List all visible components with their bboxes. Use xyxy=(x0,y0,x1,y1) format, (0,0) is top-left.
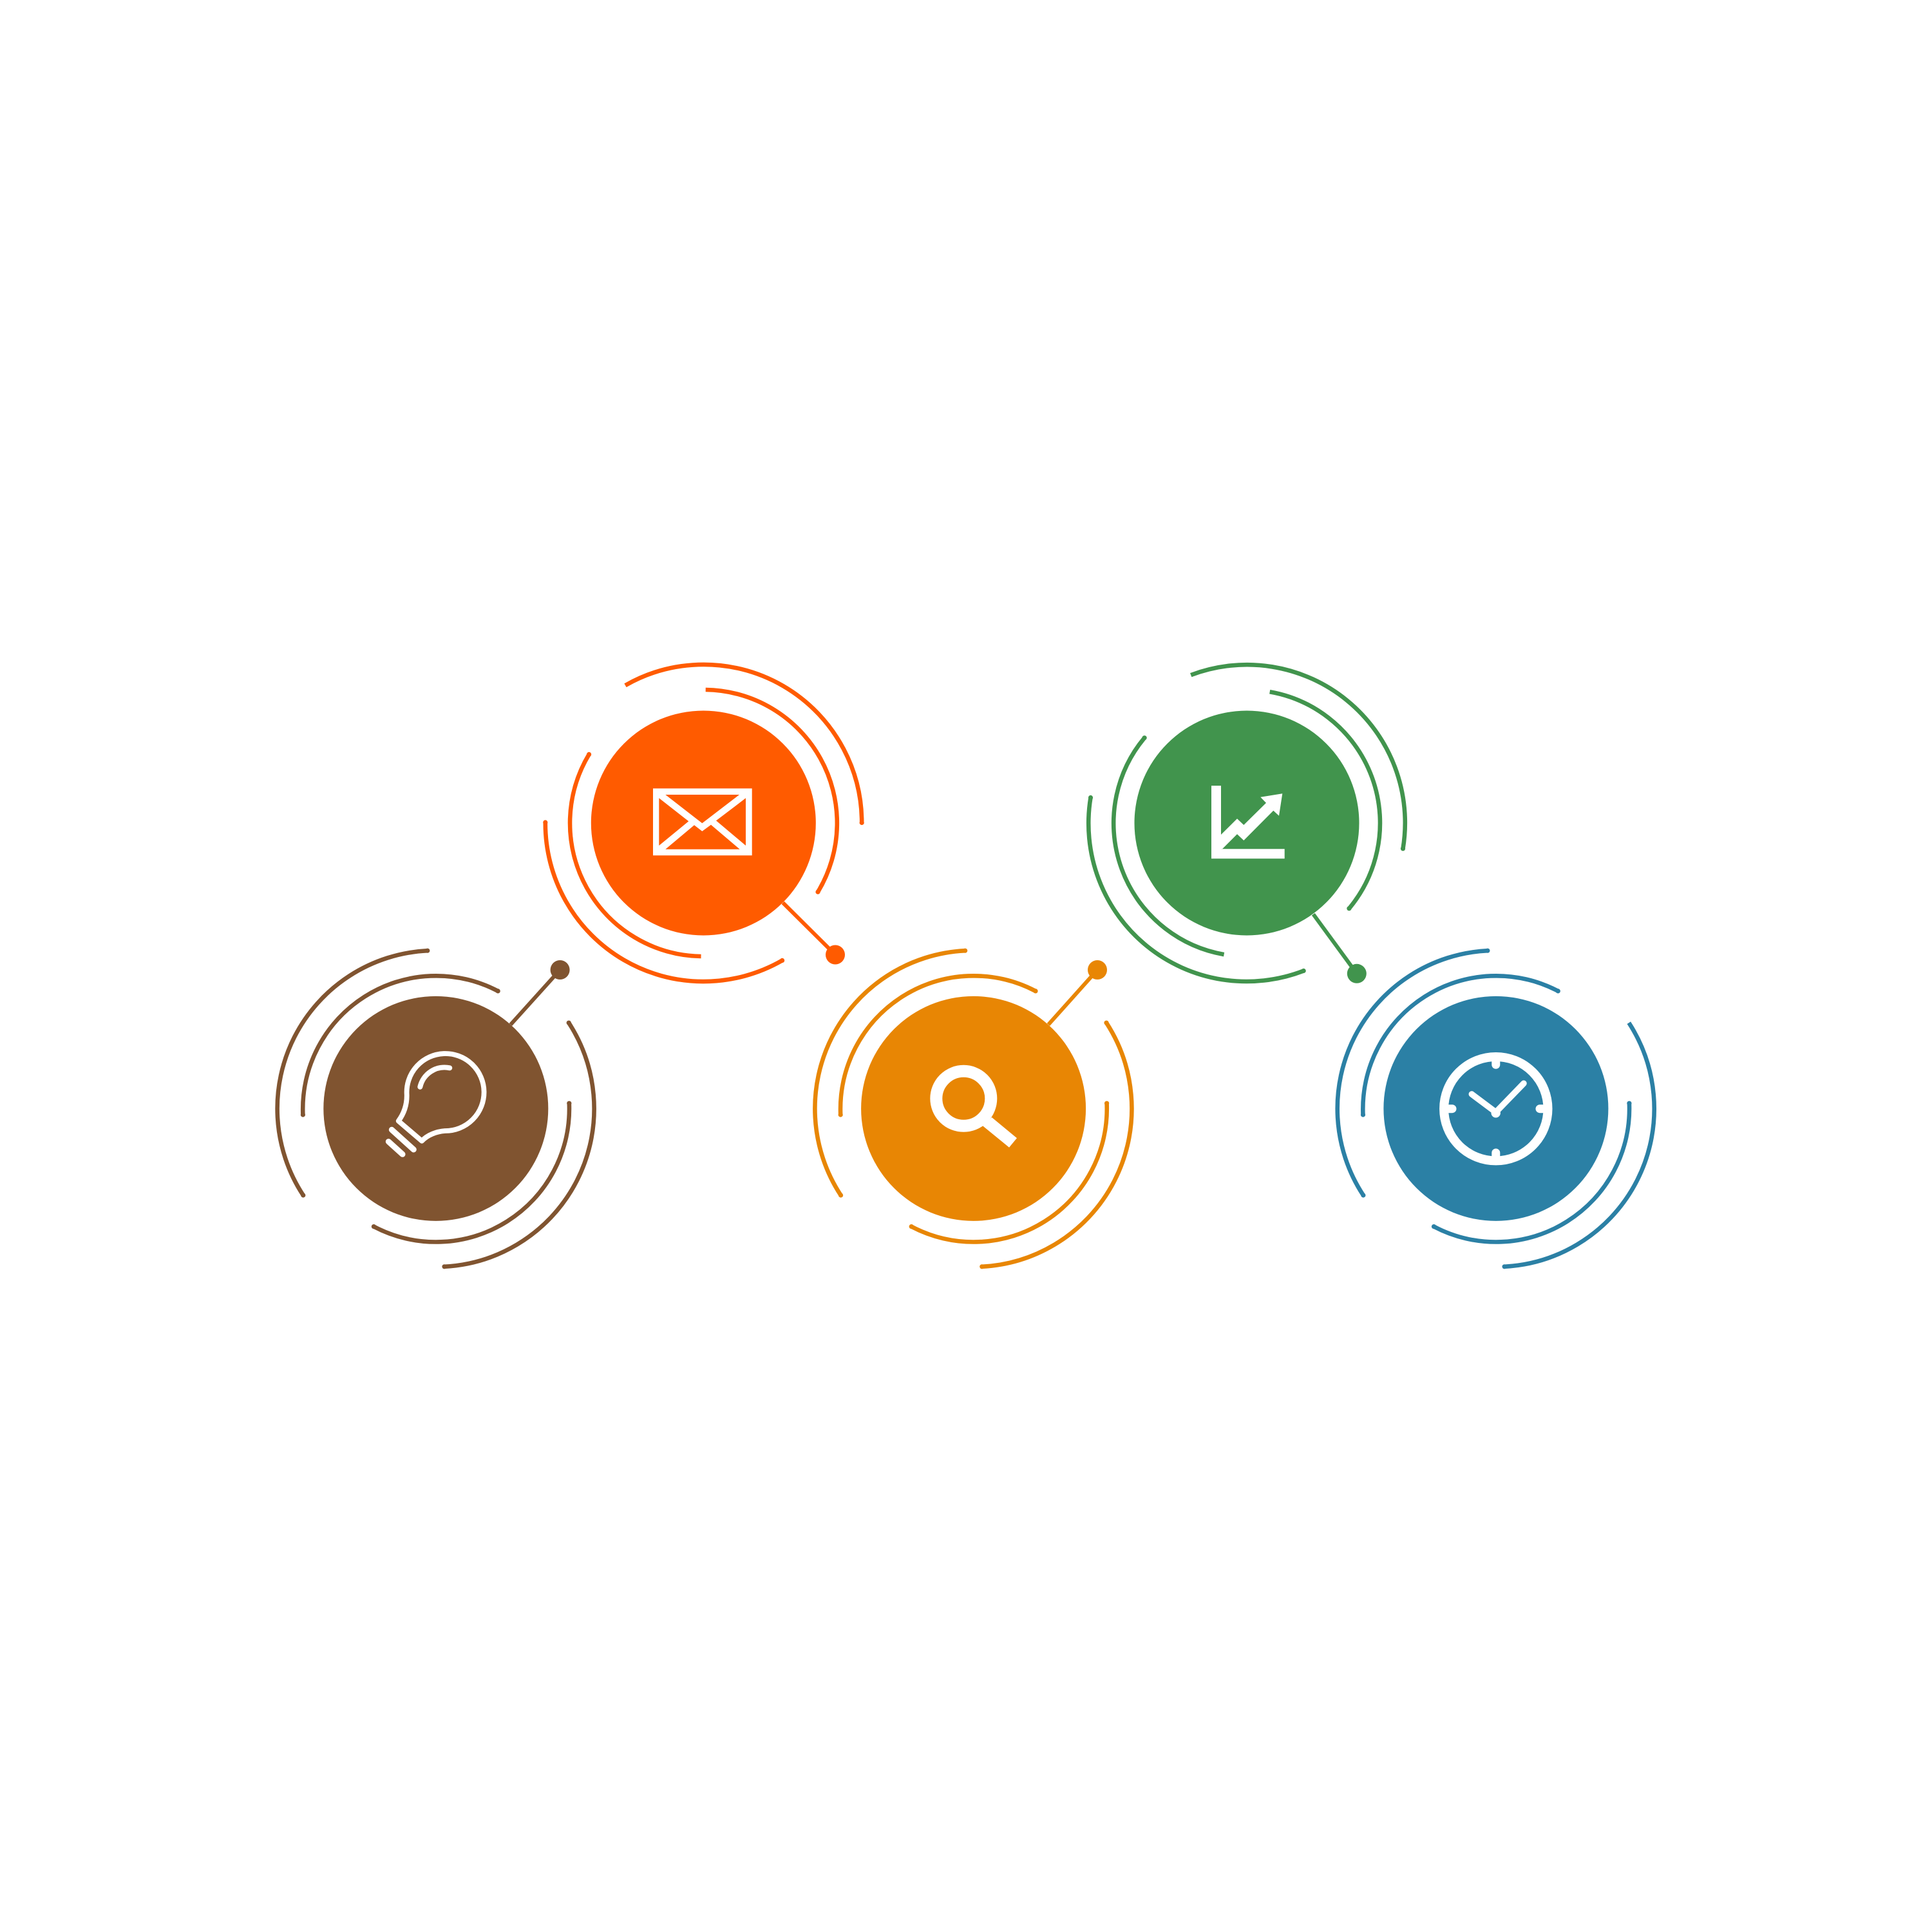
orange filled circle xyxy=(861,996,1086,1221)
panel: brown lightbulb node xyxy=(278,949,594,1269)
green filled circle xyxy=(1135,711,1359,935)
icon: clock xyxy=(1444,1057,1548,1160)
red-orange orbit arcs xyxy=(543,665,864,981)
icon: envelope xyxy=(653,788,752,855)
brown filled circle xyxy=(323,996,548,1221)
brown orbit arcs xyxy=(278,949,594,1269)
green orbit arcs xyxy=(1088,665,1405,981)
panel: green chart node xyxy=(1088,665,1405,983)
orange orbit arcs xyxy=(815,949,1132,1269)
connector: red-orange line and dot xyxy=(783,903,845,965)
icon: magnifying glass xyxy=(936,1071,1017,1148)
blue filled circle xyxy=(1383,996,1608,1221)
red-orange filled circle xyxy=(591,711,816,935)
panel: blue clock node xyxy=(1338,949,1654,1269)
panel: orange search node xyxy=(815,949,1132,1269)
blue orbit arcs xyxy=(1338,949,1654,1269)
icon: growth chart xyxy=(1211,786,1285,858)
connector: brown line and dot xyxy=(511,960,570,1025)
connector: green line and dot xyxy=(1313,914,1367,983)
panel: red-orange mail node xyxy=(543,665,864,981)
connector: orange line and dot xyxy=(1048,960,1107,1025)
icon: lightbulb xyxy=(388,1054,484,1154)
